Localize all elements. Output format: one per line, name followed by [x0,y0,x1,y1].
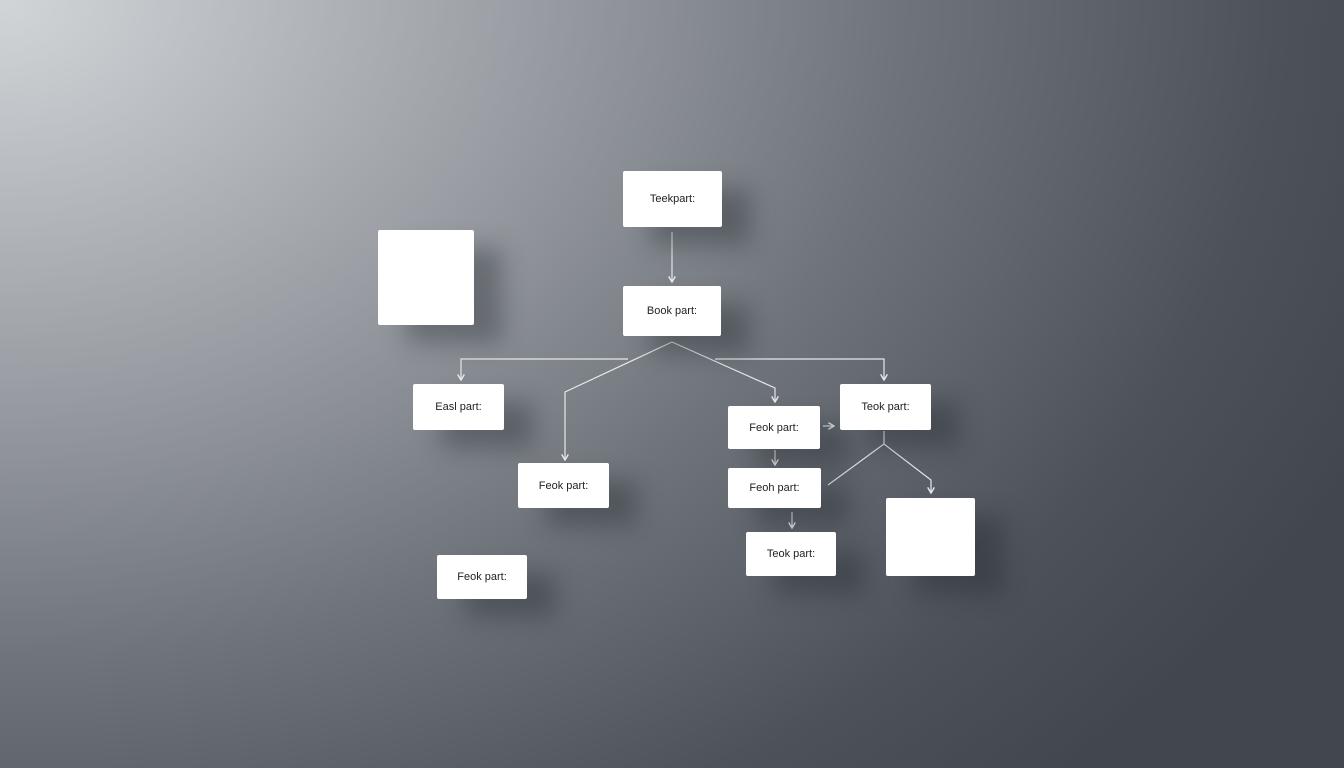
node: book part [623,286,721,336]
node: easl part: Easl part: [435,401,482,413]
node: feok part bottom left [437,555,527,599]
node: easl part [413,384,504,430]
node: top [623,171,722,227]
node: teok part bottom: Teok part: [767,548,815,560]
node: blank right [886,498,975,576]
node: feoh part: Feoh part: [749,482,800,494]
node: book part: Book part: [647,305,697,317]
node: feok part middle: Feok part: [539,480,588,492]
node: feok part right: Feok part: [749,422,799,434]
node: teok part right [840,384,931,430]
node: feok part right [728,406,820,449]
node: feoh part [728,468,821,508]
node: blank left [378,230,474,325]
node: teok part right: Teok part: [861,401,910,413]
node: feok part bottom left: Feok part: [457,571,507,583]
node: top: Teekpart: [650,193,695,205]
node: teok part bottom [746,532,836,576]
node: feok part middle [518,463,609,508]
